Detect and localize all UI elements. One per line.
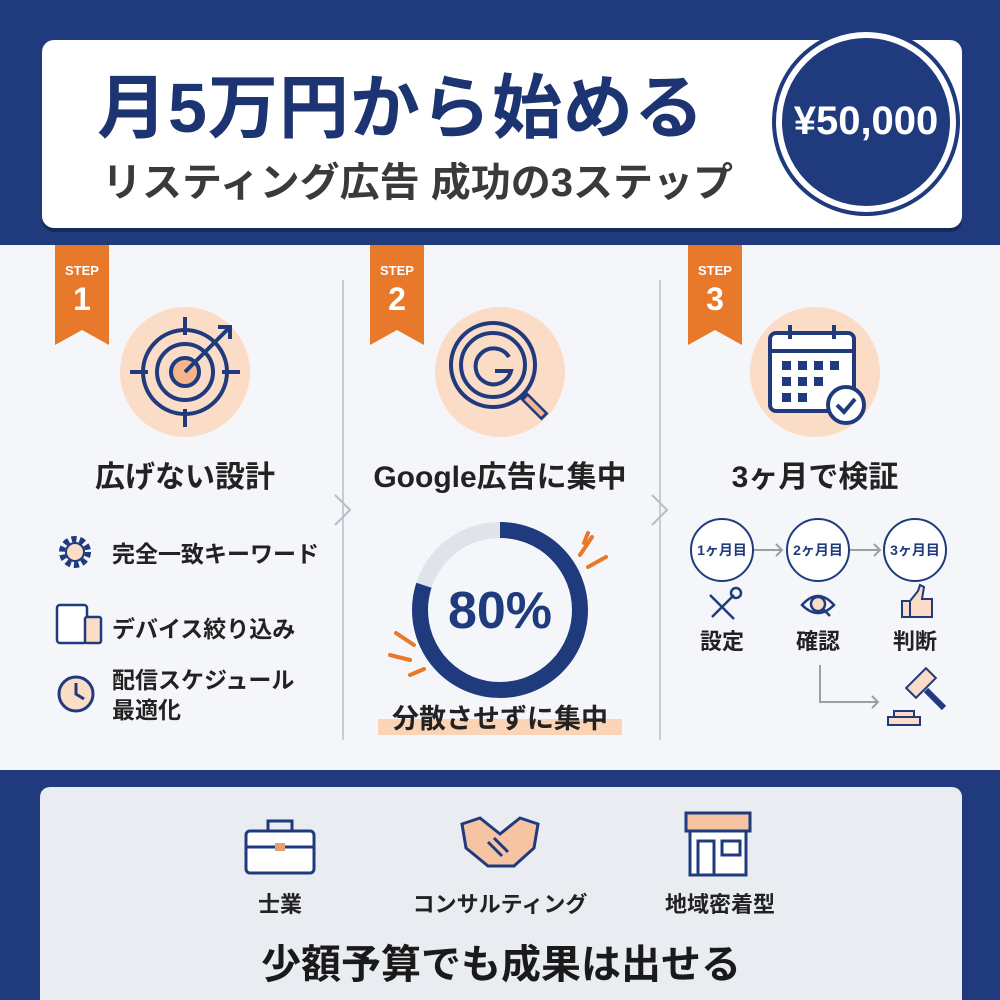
- timeline: 設定: [700, 629, 744, 654]
- donut chart 80%: 80%: [448, 582, 552, 640]
- title: 月5万円から始める: [97, 69, 705, 147]
- step 2 ribbon: [370, 245, 424, 345]
- timeline: 1ヶ月目: [697, 542, 747, 558]
- heading step 2: Google広告に集中: [373, 461, 627, 494]
- item: exact match: [59, 536, 319, 568]
- item: schedule: 最適化: [112, 697, 181, 723]
- bottom message: 少額予算でも成果は出せる: [261, 943, 741, 987]
- step 1 list: [56, 536, 319, 723]
- label: consulting: コンサルティング: [413, 892, 587, 917]
- timeline: 判断: [893, 629, 937, 654]
- accent marks: [388, 530, 608, 678]
- step 2 ribbon: 2: [388, 281, 406, 317]
- heading step 3: 3ヶ月で検証: [732, 461, 898, 494]
- heading step 1: 広げない設計: [95, 461, 275, 494]
- label: local: 地域密着型: [665, 892, 775, 917]
- title card: [42, 40, 962, 228]
- timeline: 2ヶ月目: [793, 542, 843, 558]
- timeline: 3ヶ月目: [890, 542, 940, 558]
- step 2 ribbon: STEP: [380, 263, 414, 278]
- timeline: 確認: [796, 629, 840, 654]
- item: device: [56, 604, 295, 644]
- price badge: ¥50,000: [794, 99, 938, 143]
- timeline: [690, 518, 947, 726]
- gavel: [888, 668, 944, 725]
- thumbs: [902, 585, 932, 617]
- icon: target: [120, 307, 250, 437]
- tools: [710, 588, 741, 619]
- bottom band: [0, 770, 1000, 1000]
- donut chart 80%: [412, 522, 588, 698]
- eye: [802, 596, 834, 616]
- icon: briefcase: [244, 820, 316, 874]
- step 1 ribbon: [55, 245, 109, 345]
- subtitle: リスティング広告 成功の3ステップ: [102, 161, 733, 205]
- item: device: デバイス絞り込み: [112, 616, 295, 642]
- caption: focus: 分散させずに集中: [392, 704, 608, 734]
- label: 士業: 士業: [258, 892, 302, 917]
- icon: google search: [435, 307, 565, 437]
- step 3 ribbon: STEP: [698, 263, 732, 278]
- step 3 ribbon: 3: [706, 281, 724, 317]
- bottom card: [40, 787, 962, 1000]
- item: schedule: 配信スケジュール: [112, 667, 294, 693]
- icon: shop: [684, 812, 752, 876]
- step 3 ribbon: [688, 245, 742, 345]
- step 1 ribbon: STEP: [65, 263, 99, 278]
- item: exact match: 完全一致キーワード: [112, 541, 319, 567]
- item: schedule: [58, 667, 294, 723]
- price badge: [776, 32, 956, 212]
- step 1 ribbon: 1: [73, 281, 91, 317]
- icon: calendar: [750, 307, 880, 437]
- icon: handshake: [460, 816, 540, 868]
- steps section: [55, 245, 947, 740]
- header band: [0, 0, 1000, 245]
